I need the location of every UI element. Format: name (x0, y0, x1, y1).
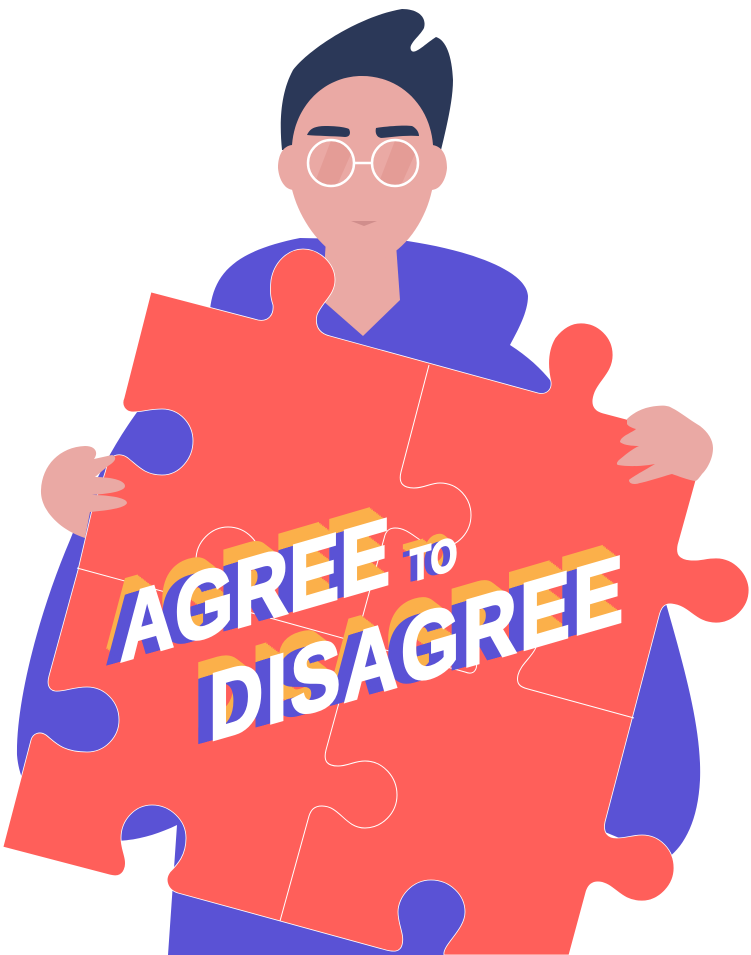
eyebrows (307, 126, 419, 138)
hand: left (41, 446, 127, 538)
hair (281, 9, 453, 150)
puzzle: red pieces (3, 249, 749, 955)
title: TO: TO (410, 526, 457, 592)
title: AGREE: AGREE (120, 498, 391, 682)
face (291, 76, 433, 258)
mouth (351, 221, 377, 226)
ears (278, 145, 447, 190)
hand: right (617, 406, 713, 484)
puzzle joins: white lines (77, 365, 634, 921)
title: DISAGREE: DISAGREE (209, 535, 626, 762)
glasses (308, 138, 422, 190)
body: purple hoodie (17, 238, 700, 955)
neck (322, 240, 400, 336)
